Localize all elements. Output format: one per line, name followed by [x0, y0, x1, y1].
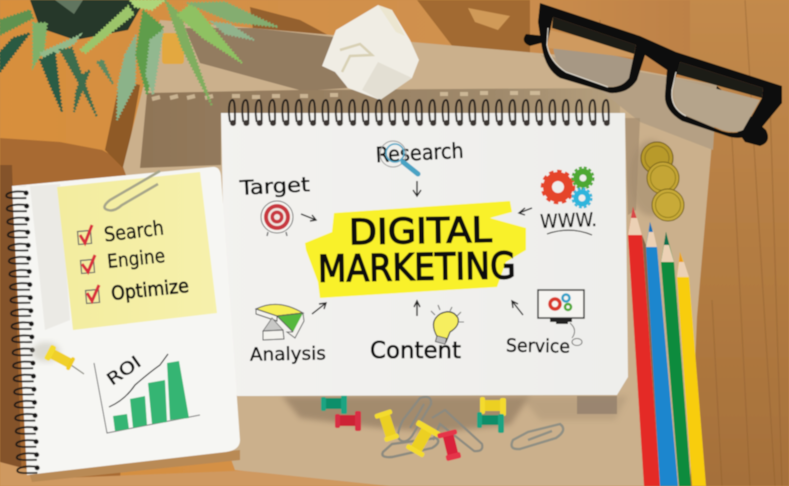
coins	[629, 140, 684, 221]
crumpled paper ball	[322, 5, 419, 100]
icon: target	[261, 201, 293, 236]
spiral binding	[1, 186, 42, 475]
spiral binding	[226, 98, 614, 128]
plant	[0, 0, 278, 120]
arrow: research	[413, 181, 421, 196]
label: content: Content	[370, 338, 461, 364]
checklist item: optimize: Optimize	[110, 275, 190, 305]
icon: pie chart	[256, 304, 304, 340]
arrow: service	[512, 301, 523, 315]
paper clip	[104, 171, 160, 210]
icon: magnifier	[380, 141, 418, 174]
panel: left notebook	[1, 167, 240, 482]
yellow highlight	[305, 201, 526, 298]
ROI bar chart: ROI	[103, 352, 145, 390]
label: target: Target	[238, 172, 311, 200]
icon: light bulb	[431, 305, 464, 344]
ROI bar chart	[94, 352, 200, 433]
label: service: Service	[506, 335, 570, 358]
arrow: content	[414, 301, 420, 316]
checklist item: engine: Engine	[106, 245, 166, 273]
glasses	[524, 3, 782, 146]
arrow: analysis	[312, 303, 326, 314]
icon: monitor	[538, 290, 584, 346]
checklist item: search: Search	[103, 215, 165, 247]
pencils	[628, 207, 706, 486]
desk pins and paper clips	[321, 395, 617, 462]
arrow: www	[519, 208, 532, 215]
push pin	[32, 342, 84, 374]
title: digital marketing	[317, 211, 516, 291]
label: analysis: Analysis	[250, 343, 326, 366]
icon: gears	[542, 168, 594, 208]
title: digital marketing: DIGITAL	[348, 211, 493, 253]
checklist item: search	[77, 215, 165, 247]
arrow: target	[301, 214, 316, 221]
kraft paper folder	[123, 20, 717, 486]
title: digital marketing: MARKETING	[317, 244, 516, 291]
label: www: WWW.	[540, 209, 597, 233]
sticky note	[57, 171, 217, 330]
checklist item: engine	[80, 245, 166, 273]
panel: main spiral notebook	[221, 98, 628, 396]
label: research: Research	[375, 139, 464, 167]
